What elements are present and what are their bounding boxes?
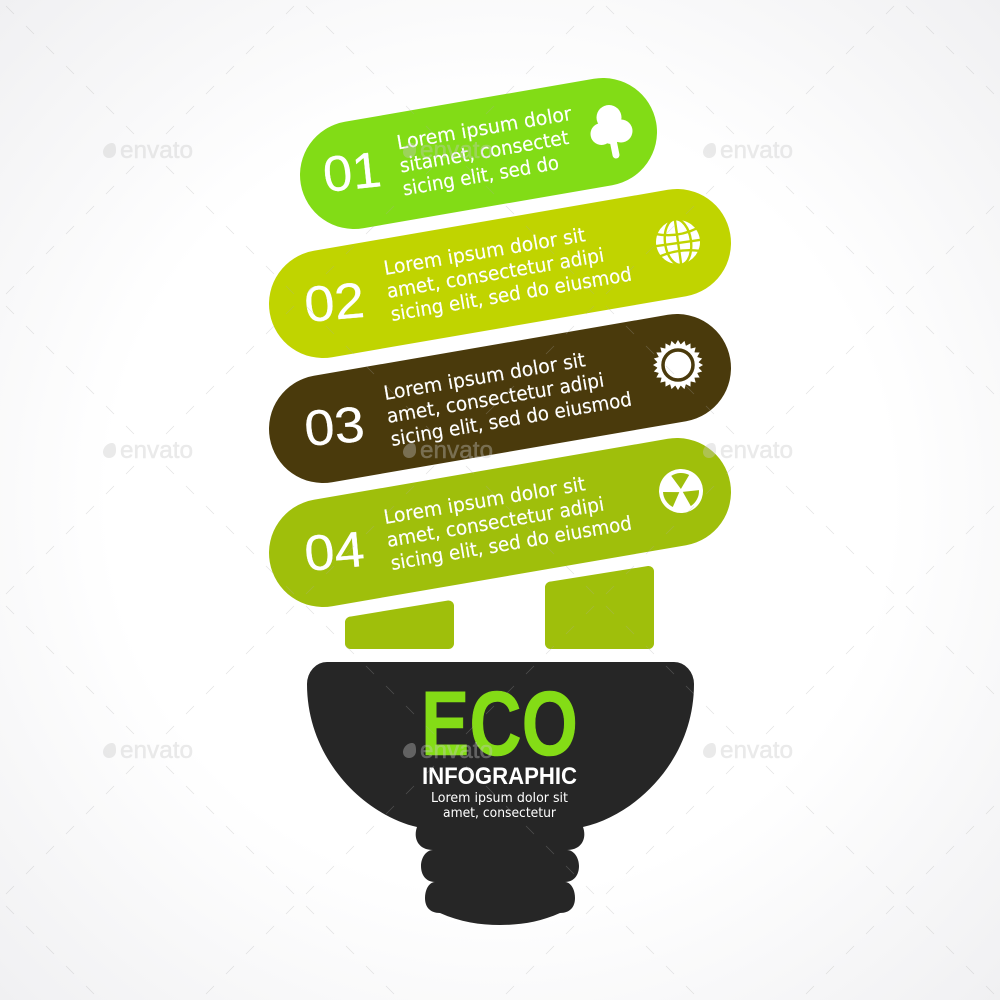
watermarks: envato	[120, 737, 193, 764]
text block 03	[382, 348, 633, 451]
base description: amet, consectetur	[443, 806, 557, 821]
watermarks: envato	[120, 437, 193, 464]
bulb connector: small leg	[345, 600, 454, 649]
watermarks: envato	[420, 437, 493, 464]
watermarks	[103, 137, 793, 764]
base description	[431, 791, 568, 821]
text block 04	[382, 472, 633, 575]
text block 03: Lorem ipsum dolor sit	[382, 348, 587, 405]
panel: step 02	[302, 216, 704, 333]
text block 01	[395, 102, 574, 200]
icon: globe	[652, 216, 704, 268]
pill 02	[323, 243, 677, 304]
watermarks: envato	[420, 137, 493, 164]
icon: sun	[653, 340, 703, 390]
text block 02: Lorem ipsum dolor sit	[382, 223, 587, 280]
subtitle: INFOGRAPHIC: INFOGRAPHIC	[422, 763, 577, 790]
text block 02: sicing elit, sed do eiusmod	[389, 263, 633, 326]
number 02: 02	[302, 272, 367, 333]
number 03: 03	[302, 396, 367, 457]
icon: radiation	[658, 468, 704, 514]
text block 01: sitamet, consectet	[398, 126, 571, 177]
pill 04	[323, 492, 677, 553]
base description: Lorem ipsum dolor sit	[431, 791, 568, 806]
pill 03	[323, 368, 677, 429]
watermarks: envato	[420, 737, 493, 764]
text block 02: amet, consectetur adipi	[385, 244, 606, 303]
number 01: 01	[320, 141, 384, 203]
panel: step 04	[302, 468, 704, 582]
text block 04: Lorem ipsum dolor sit	[382, 472, 587, 529]
watermarks: envato	[720, 437, 793, 464]
icon: tree	[590, 105, 632, 155]
panel: step 01	[320, 102, 632, 203]
text block 03: sicing elit, sed do eiusmod	[389, 388, 633, 451]
pill 01	[354, 132, 603, 175]
watermarks: envato	[120, 137, 193, 164]
watermarks: envato	[720, 737, 793, 764]
bulb connector: large leg	[545, 566, 654, 649]
text block 04: sicing elit, sed do eiusmod	[389, 512, 633, 575]
text block 01: Lorem ipsum dolor	[395, 102, 574, 154]
text block 02	[382, 223, 633, 326]
number 04: 04	[302, 521, 367, 582]
panel: step 03	[302, 340, 703, 457]
title: ECO: ECO	[421, 673, 578, 775]
watermarks: envato	[720, 137, 793, 164]
text block 01: sicing elit, sed do	[401, 151, 561, 200]
text block 03: amet, consectetur adipi	[385, 369, 606, 428]
text block 04: amet, consectetur adipi	[385, 493, 606, 552]
bulb base	[307, 662, 694, 925]
